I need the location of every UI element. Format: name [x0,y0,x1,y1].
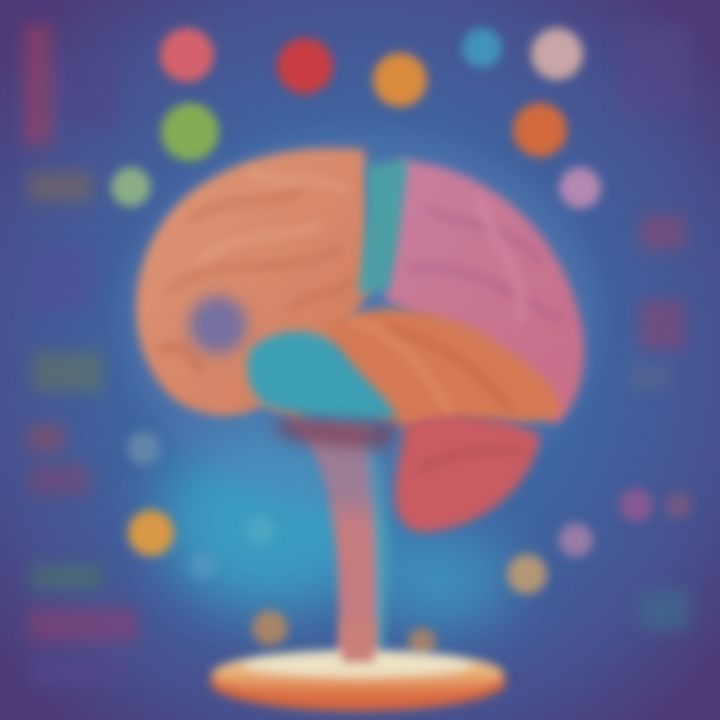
brain glow [120,130,600,510]
base platform [210,650,506,711]
brain [120,130,600,532]
brain: left lobe [136,148,370,420]
icon: lower circles [127,431,692,656]
icon: top row circles [111,28,601,209]
stem join [342,620,374,662]
brain stem [285,420,389,665]
brain: right lobe [385,160,584,425]
brain: bottom red lobe [395,415,540,532]
brain: teal band [358,160,408,294]
brain: dark lower shadow [270,419,400,450]
brain: teal lobe [247,331,398,419]
brain: grey purple node [189,296,247,354]
brain: lower orange lobe [325,309,560,428]
background glow: teal lower centre [160,430,510,625]
brain: surface folds [160,170,560,470]
